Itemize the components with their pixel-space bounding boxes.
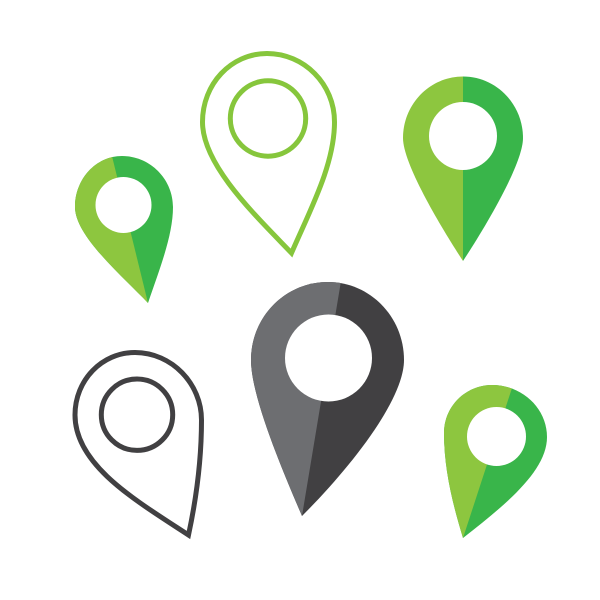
pin: two-tone green, tilted left — [75, 156, 173, 303]
pin: two-tone green, tilted right — [444, 385, 547, 538]
pin: two-tone green, vertical split, top right — [400, 70, 526, 265]
pin: dark outline, lower left — [75, 352, 202, 535]
pin: green outline, top centre — [202, 54, 334, 253]
pin: two-tone gray, centre — [251, 282, 404, 516]
illustration: set of six map pins — [72, 51, 547, 540]
